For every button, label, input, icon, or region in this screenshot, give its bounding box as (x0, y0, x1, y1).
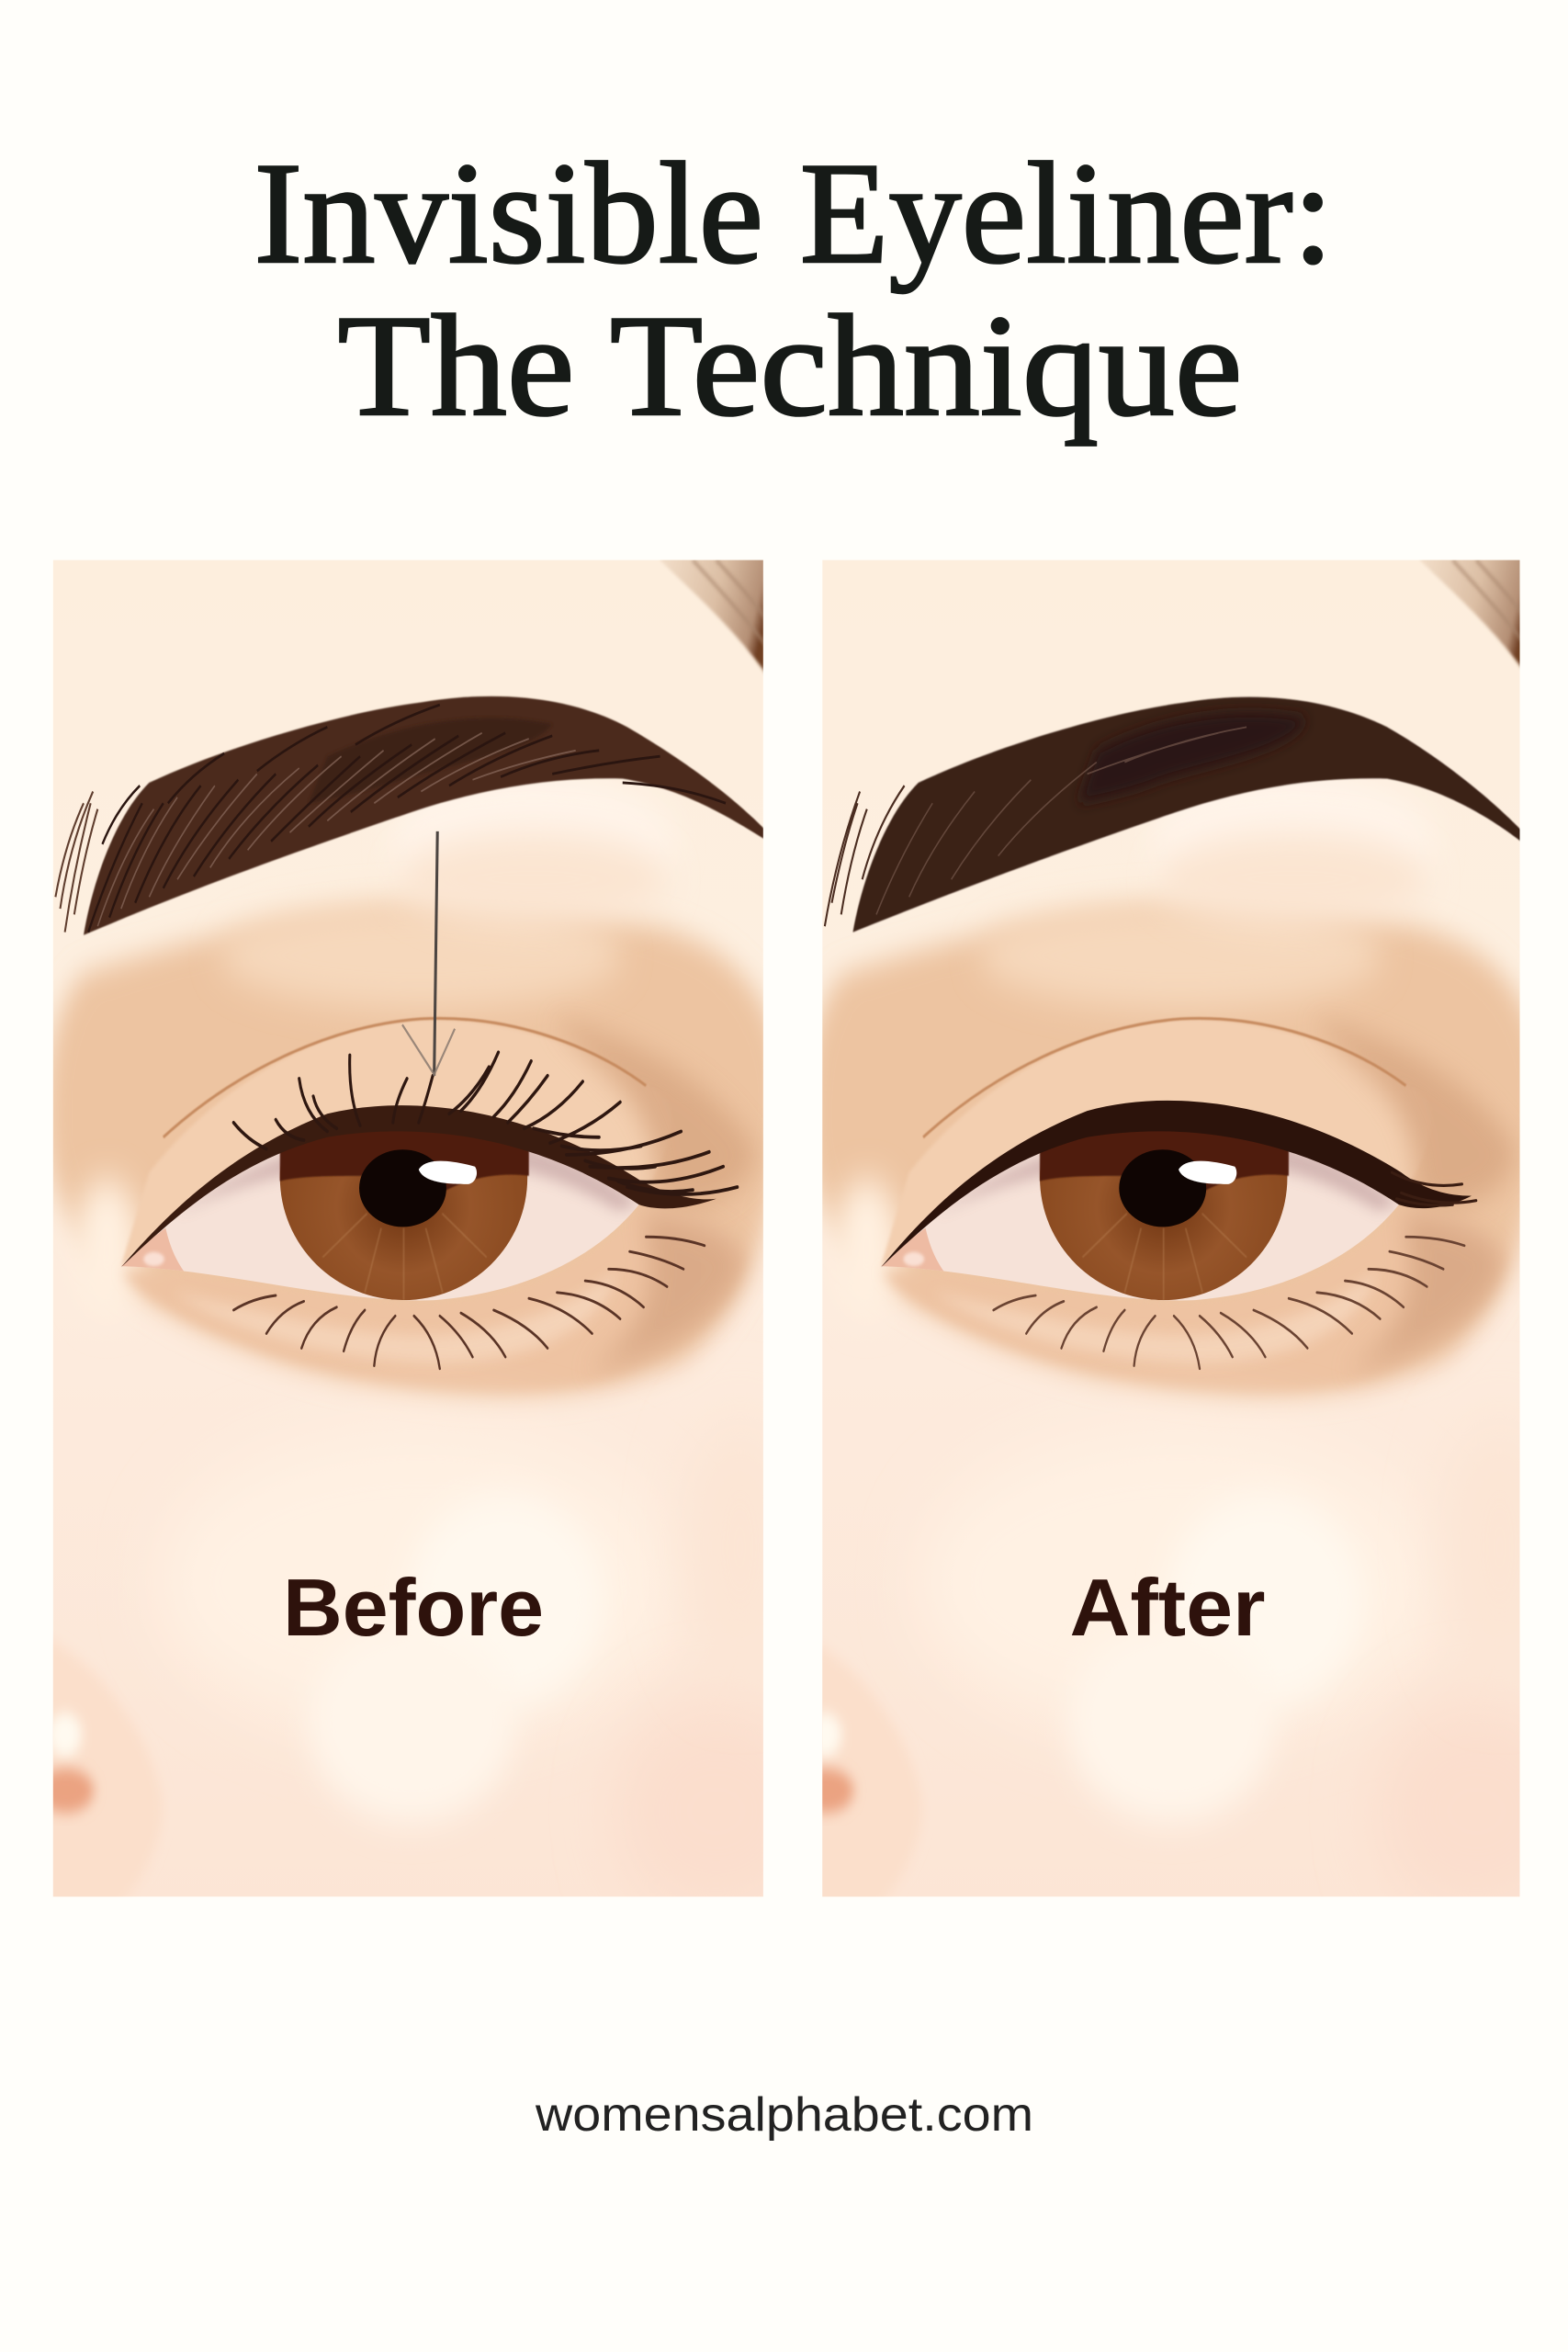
eyeliner (881, 1101, 1472, 1267)
title (254, 133, 1334, 447)
label: after: After (1069, 1562, 1266, 1653)
icon: after eye (881, 1101, 1477, 1301)
skin and face shading (53, 560, 763, 1896)
brow tail strokes (55, 791, 97, 933)
upper lashes (233, 1052, 738, 1194)
label: before: Before (283, 1562, 544, 1653)
lower lashes (233, 1237, 705, 1369)
panel: after (822, 560, 1519, 1896)
title: The Technique (338, 286, 1242, 447)
brow tail strokes (825, 786, 905, 926)
liner wing strokes (1392, 1172, 1476, 1205)
icon: before eye (121, 1052, 738, 1300)
title: Invisible Eyeliner: (254, 133, 1334, 294)
arrow (402, 831, 455, 1076)
panel: before (53, 560, 763, 1896)
brow hairs (97, 733, 576, 926)
footer website: womensalphabet.com (535, 2088, 1033, 2142)
icon: after eyebrow (825, 697, 1521, 933)
icon: before eyebrow (55, 696, 768, 935)
brow hairs (876, 727, 1247, 914)
upper lash line (121, 1105, 716, 1267)
skin and face shading (822, 560, 1519, 1896)
lower lashes (994, 1237, 1464, 1369)
